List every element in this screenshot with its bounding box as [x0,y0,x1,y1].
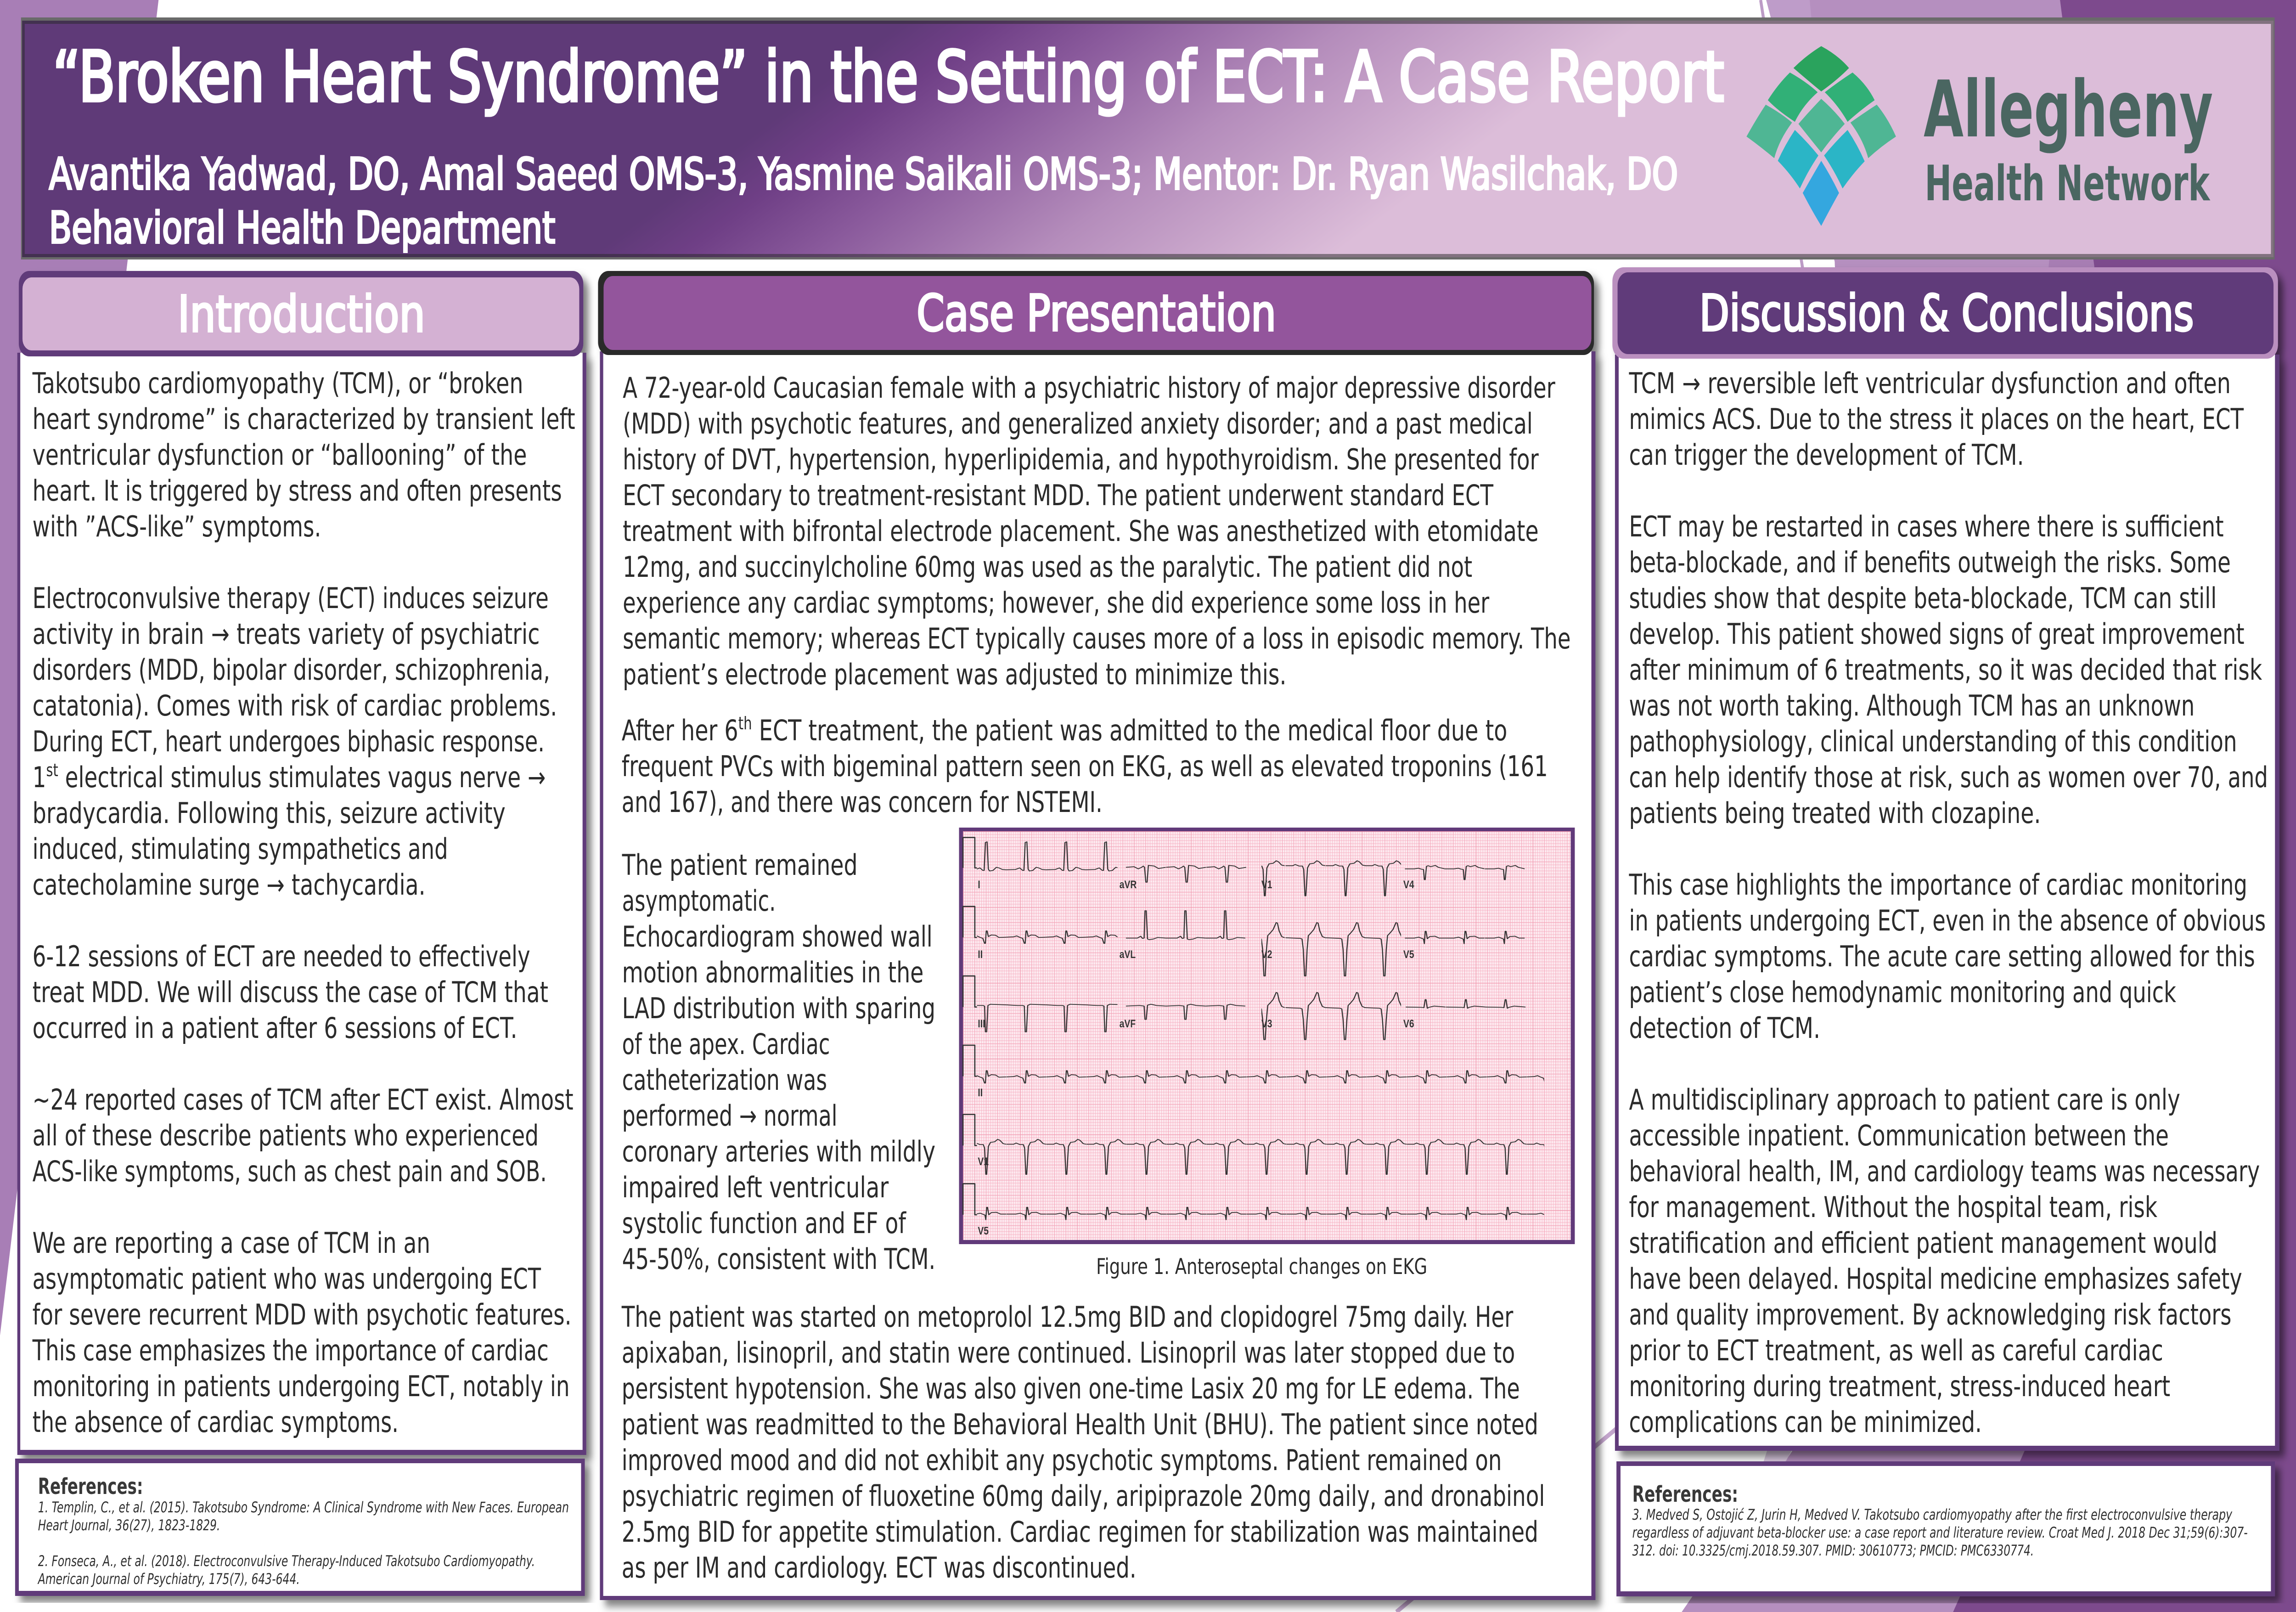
EKG lead labels: II [978,1086,983,1099]
text: TCM summary: TCM → reversible left ventricular dysfunction and often [1629,367,2231,400]
text: multidisciplinary approach: and quality improvement. By acknowledging risk factors [1629,1299,2231,1331]
panel: references right [1616,1461,2275,1596]
text: treatment course: The patient was started on metoprolol 12.5mg BID and clopidogrel 75mg daily. Her [621,1301,1514,1334]
text: patient history: patient’s electrode placement was adjusted to minimize this. [623,659,1287,691]
heading: introduction: Introduction [178,284,425,344]
text: TCM overview [32,367,575,543]
reference list [1632,1506,2248,1559]
text: multidisciplinary approach: stratification and efficient patient management would [1629,1227,2217,1260]
text: restarting ECT: pathophysiology, clinical understanding of this condition [1629,726,2237,758]
text: admission: After her 6 [622,715,731,747]
text: echocardiogram findings: systolic function and EF of [622,1207,906,1240]
text: cardiac monitoring: cardiac symptoms. The acute care setting allowed for this [1629,941,2255,973]
text: multidisciplinary approach: accessible inpatient. Communication between the [1629,1120,2169,1152]
text: case purpose: This case emphasizes the importance of cardiac [32,1335,549,1367]
text: TCM summary: mimics ACS. Due to the stress it places on the heart, ECT [1629,403,2244,436]
text: multidisciplinary approach [1629,1084,2260,1439]
text: sessions: occurred in a patient after 6 sessions of ECT. [33,1012,518,1045]
reference list: American Journal of Psychiatry, 175(7), 643-644. [37,1570,300,1588]
text: TCM overview: Takotsubo cardiomyopathy (TCM), or “broken [32,367,523,400]
EKG lead labels: aVF [1120,1017,1136,1030]
text: echocardiogram findings [622,849,935,1276]
text: case purpose [32,1227,572,1439]
text: echocardiogram findings: of the apex. Cardiac [622,1028,830,1061]
text: echocardiogram findings: coronary arteries with mildly [622,1136,935,1168]
heading: discussion and conclusions: Discussion & Conclusions [1699,283,2194,343]
panel: case presentation [598,271,1595,1600]
text: multidisciplinary approach: behavioral health, IM, and cardiology teams was necessary [1629,1155,2260,1188]
text: admission: and 167), and there was concern for NSTEMI. [622,786,1103,819]
text: treatment course: as per IM and cardiology. ECT was discontinued. [622,1552,1137,1584]
text: restarting ECT: beta-blockade, and if benefits outweigh the risks. Some [1629,547,2231,579]
EKG lead labels: V1 [978,1155,989,1168]
references heading: References: [1632,1482,1738,1507]
text: cardiac monitoring: This case highlights the importance of cardiac monitoring [1629,869,2247,902]
department: Behavioral Health Department [49,203,555,254]
reference list: 3. Medved S, Ostojić Z, Jurin H, Medved V. Takotsubo cardiomyopathy after the first electroconvulsive therapy [1632,1506,2233,1523]
text: ECT background: st [46,761,58,781]
text: echocardiogram findings: performed → normal [622,1100,838,1133]
references heading: References: [38,1474,143,1499]
text: case purpose: the absence of cardiac symptoms. [33,1406,399,1439]
text: echocardiogram findings: impaired left ventricular [622,1172,889,1204]
logo: Allegheny Health Network [1746,46,2213,226]
text: TCM overview: with ”ACS-like” symptoms. [33,511,321,543]
EKG lead labels [978,878,1414,1237]
text: multidisciplinary approach: prior to ECT treatment, as well as careful cardiac [1629,1335,2163,1367]
text: cardiac monitoring: in patients undergoing ECT, even in the absence of obvious [1629,905,2266,937]
text: reported cases: ACS-like symptoms, such as chest pain and SOB. [33,1155,547,1188]
text: echocardiogram findings: asymptomatic. [622,885,776,918]
EKG lead labels: V4 [1403,878,1414,891]
text: echocardiogram findings: LAD distribution with sparing [622,992,935,1025]
figure caption: Figure 1. Anteroseptal changes on EKG [1096,1254,1427,1279]
text: multidisciplinary approach: A multidisciplinary approach to patient care is only [1629,1084,2180,1116]
text: echocardiogram findings: The patient remained [622,849,858,882]
text: TCM overview: heart syndrome” is characterized by transient left [33,403,575,436]
panel: references left [15,1459,585,1596]
text: ECT background: induced, stimulating sympathetics and [33,833,448,866]
text: admission: ECT treatment, the patient was admitted to the medical floor due to [752,715,1507,747]
panel: introduction [17,271,586,1455]
title banner [21,17,2274,259]
text: case purpose: We are reporting a case of TCM in an [33,1227,430,1260]
text: sessions: treat MDD. We will discuss the case of TCM that [33,976,548,1009]
text: treatment course: psychiatric regimen of fluoxetine 60mg daily, aripiprazole 20mg daily, and dronabinol [622,1480,1545,1513]
reference list: Heart Journal, 36(27), 1823-1829. [38,1516,220,1534]
text: cardiac monitoring [1629,869,2266,1045]
text: patient history: experience any cardiac symptoms; however, she did experience some loss in her [623,587,1489,620]
EKG lead labels: III [978,1017,985,1030]
EKG lead labels: V5 [1403,948,1414,961]
reference list: 1. Templin, C., et al. (2015). Takotsubo Syndrome: A Clinical Syndrome with New Faces. European [38,1499,569,1516]
text: cardiac monitoring: patient’s close hemodynamic monitoring and quick [1629,976,2177,1009]
text: reported cases: ~24 reported cases of TCM after ECT exist. Almost [33,1084,574,1116]
text: ECT background: During ECT, heart undergoes biphasic response. [33,726,545,758]
EKG lead labels: V5 [978,1224,989,1237]
text: patient history: semantic memory; whereas ECT typically causes more of a loss in episodic memory. The [623,623,1571,655]
text: multidisciplinary approach: monitoring during treatment, stress-induced heart [1629,1370,2170,1403]
text: treatment course: patient was readmitted to the Behavioral Health Unit (BHU). The patient since noted [622,1409,1538,1441]
text: ECT background: bradycardia. Following this, seizure activity [33,797,506,830]
chart: EKG figure [959,828,1575,1244]
reference list [37,1499,569,1588]
text: restarting ECT: was not worth taking. Although TCM has an unknown [1629,690,2195,722]
EKG lead labels: V3 [1261,1017,1272,1030]
text: restarting ECT: patients being treated with clozapine. [1629,797,2041,830]
text: case purpose: for severe recurrent MDD with psychotic features. [33,1299,572,1331]
reference list: regardless of adjuvant beta-blocker use: a case report and literature review. Croat Med J. 2018 Dec 31;59(6):307- [1632,1524,2248,1541]
text: patient history: history of DVT, hypertension, hyperlipidemia, and hypothyroidism. She presented for [623,444,1539,476]
text: treatment course: 2.5mg BID for appetite stimulation. Cardiac regimen for stabilization was maintained [622,1516,1538,1549]
text: admission: th [738,714,752,734]
text: ECT background: activity in brain → treats variety of psychiatric [33,618,540,651]
text: TCM summary [1629,367,2244,472]
text: cardiac monitoring: detection of TCM. [1629,1012,1820,1045]
text: ECT background: Electroconvulsive therapy (ECT) induces seizure [33,582,549,615]
text: TCM overview: ventricular dysfunction or “ballooning” of the [33,439,527,472]
text: case purpose: monitoring in patients undergoing ECT, notably in [33,1370,570,1403]
EKG lead labels: II [978,948,983,961]
text: ECT background: catatonia). Comes with risk of cardiac problems. [33,690,557,722]
panel: discussion and conclusions [1612,267,2279,1451]
text: sessions: 6-12 sessions of ECT are needed to effectively [33,941,530,973]
text: ECT background: catecholamine surge → tachycardia. [33,869,426,902]
EKG lead labels: V2 [1261,948,1272,961]
text: restarting ECT [1629,511,2268,830]
poster title: “Broken Heart Syndrome” in the Setting of ECT: A Case Report [53,36,1724,118]
text: ECT background: disorders (MDD, bipolar disorder, schizophrenia, [33,654,550,687]
text: patient history: (MDD) with psychotic features, and generalized anxiety disorder; and a past medical [623,408,1533,440]
text: patient history: A 72-year-old Caucasian female with a psychiatric history of major depressive disorder [623,372,1555,405]
text: admission [622,714,1548,819]
logo subline: Health Network [1925,155,2211,212]
text: ECT background: electrical stimulus stimulates vagus nerve → [58,761,546,794]
text: restarting ECT: after minimum of 6 treatments, so it was decided that risk [1629,654,2262,687]
text: multidisciplinary approach: for management. Without the hospital team, risk [1629,1191,2158,1224]
text: case purpose: asymptomatic patient who was undergoing ECT [33,1263,541,1296]
text: sessions [33,941,548,1045]
reference list: 312. doi: 10.3325/cmj.2018.59.307. PMID: 30610773; PMCID: PMC6330774. [1632,1542,2034,1559]
text: TCM summary: can trigger the development of TCM. [1629,439,2024,472]
authors: Avantika Yadwad, DO, Amal Saeed OMS-3, Yasmine Saikali OMS-3; Mentor: Dr. Ryan Wasilchak, DO [49,149,1678,200]
icon: leaf mark [1746,46,1896,226]
EKG lead labels: aVL [1120,948,1136,961]
text: patient history: 12mg, and succinylcholine 60mg was used as the paralytic. The patient did not [623,551,1472,584]
text: treatment course: apixaban, lisinopril, and statin were continued. Lisinopril was later stopped due to [622,1337,1515,1370]
text: restarting ECT: ECT may be restarted in cases where there is sufficient [1629,511,2224,543]
text: multidisciplinary approach: have been delayed. Hospital medicine emphasizes safety [1629,1263,2242,1296]
text: echocardiogram findings: catheterization was [622,1064,827,1097]
text: ECT background: 1 [33,761,45,794]
EKG lead labels: V1 [1261,878,1272,891]
heading: case presentation: Case Presentation [917,283,1276,343]
text: patient history: treatment with bifrontal electrode placement. She was anesthetized with etomidate [623,515,1539,548]
text: treatment course [621,1301,1545,1584]
logo wordmark: Allegheny [1924,64,2213,155]
EKG lead labels: V6 [1403,1017,1414,1030]
text: patient history [623,372,1571,691]
reference list: 2. Fonseca, A., et al. (2018). Electroconvulsive Therapy-Induced Takotsubo Cardiomyopathy. [38,1552,535,1570]
text: admission: frequent PVCs with bigeminal pattern seen on EKG, as well as elevated troponins (161 [622,750,1548,783]
text: restarting ECT: studies show that despite beta-blockade, TCM can still [1629,582,2217,615]
text: patient history: ECT secondary to treatment-resistant MDD. The patient underwent standard ECT [623,479,1494,512]
EKG lead labels: aVR [1120,878,1137,891]
text: reported cases [33,1084,574,1188]
text: restarting ECT: develop. This patient showed signs of great improvement [1629,618,2245,651]
text: TCM overview: heart. It is triggered by stress and often presents [33,475,562,507]
text: echocardiogram findings: 45-50%, consistent with TCM. [622,1243,935,1276]
text: reported cases: all of these describe patients who experienced [33,1120,539,1152]
text: echocardiogram findings: motion abnormalities in the [622,957,923,989]
text: echocardiogram findings: Echocardiogram showed wall [622,921,933,953]
text: treatment course: persistent hypotension. She was also given one-time Lasix 20 mg for LE edema. The [622,1373,1520,1405]
text: restarting ECT: can help identify those at risk, such as women over 70, and [1629,761,2268,794]
text: ECT background [33,582,557,902]
text: multidisciplinary approach: complications can be minimized. [1629,1406,1982,1439]
EKG lead labels: I [978,878,980,891]
text: treatment course: improved mood and did not exhibit any psychotic symptoms. Patient remained on [622,1444,1502,1477]
